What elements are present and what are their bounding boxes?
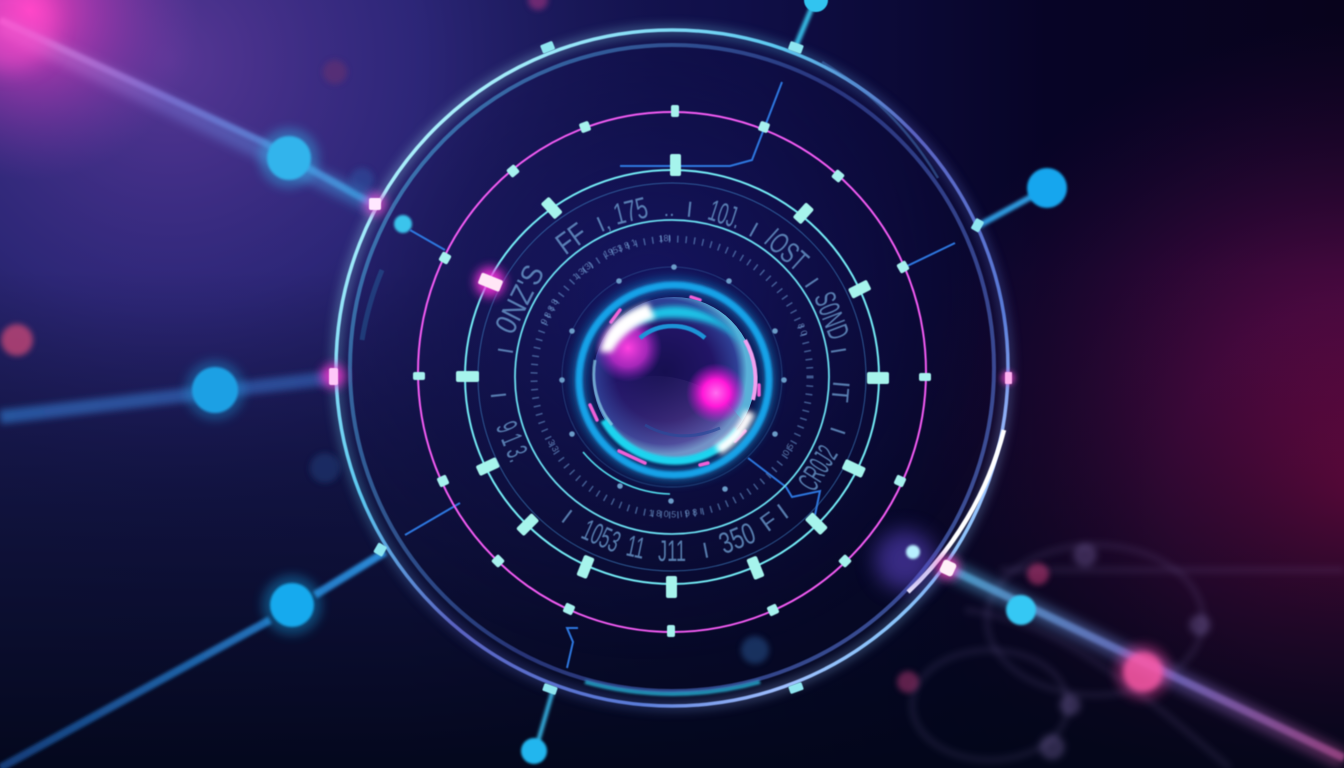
connector: bottom-left beam with node (0, 552, 385, 768)
cyan data rings (465, 170, 879, 584)
connector: bottom-right beam with nodes (897, 563, 1344, 760)
tiny scale digits: 8 0 (796, 322, 809, 337)
thin blue circuit traces (405, 82, 955, 668)
ghost circuit loops, bottom right (912, 545, 1344, 768)
tiny scale digits (538, 233, 809, 520)
data ring lettering: CR0J2 (792, 440, 844, 497)
connector: bottom node (521, 690, 553, 764)
data ring lettering: 0NZ'S (489, 260, 551, 339)
data ring lettering: I (745, 217, 762, 242)
data ring lettering: I (700, 537, 711, 563)
magenta ring (418, 112, 926, 632)
data ring lettering: 175 (610, 191, 651, 232)
data ring lettering: IOST (758, 223, 814, 278)
data ring lettering: .. (663, 199, 675, 221)
core lens ring (579, 285, 769, 475)
faint decorative orbs (310, 0, 548, 483)
data ring lettering: FF (550, 217, 594, 261)
data ring lettering: 11 (623, 530, 648, 566)
data ring lettering (486, 191, 855, 568)
lens glass interior (338, 32, 1006, 704)
tiny scale digits: 1 8 0 5 (648, 508, 677, 520)
data ring lettering: J11 (658, 535, 686, 568)
connector: top node (795, 0, 828, 48)
pink blurred node, left (1, 324, 33, 356)
data ring lettering: I (493, 346, 518, 356)
data ring lettering: I (825, 424, 851, 438)
connector: right node (978, 168, 1067, 226)
connector: left beam with node (0, 360, 330, 420)
outer glass ring (336, 30, 1008, 706)
large cyan ring markers (456, 154, 889, 598)
pink ring dashes (590, 297, 759, 465)
data ring lettering: F I (755, 499, 794, 537)
data ring lettering: I (826, 346, 851, 356)
data ring lettering: 1053 (577, 514, 625, 559)
data ring lettering: I (557, 505, 577, 528)
data ring lettering: I (685, 197, 694, 222)
data ring lettering: S0ND (807, 288, 855, 344)
glowing pink junction nodes (321, 193, 1015, 590)
small orb near lower rim (741, 636, 769, 664)
data ring lettering: 350 (714, 517, 760, 561)
radial tick scale (534, 239, 810, 515)
data ring lettering: I (800, 273, 824, 292)
tiny scale digits: 0 5 (781, 442, 796, 458)
tiny scale digits: 3 3 (546, 438, 561, 453)
inner ring dots (559, 264, 787, 504)
tiny scale digits: 18I (658, 233, 671, 244)
connector: top-left beam with node (0, 0, 375, 205)
tiny scale digits: 1 3(3) (570, 259, 595, 282)
outer ring connector tabs (373, 41, 984, 695)
magenta ring markers (413, 105, 931, 637)
data ring lettering: IT (825, 380, 854, 404)
central glass orb (593, 297, 756, 461)
tiny scale digits: 9 8 8 8 (538, 297, 560, 326)
data ring lettering: 9 1 3. (489, 417, 535, 466)
tiny scale digits: I 9 8 I (679, 506, 703, 519)
data ring lettering: 10J. (704, 194, 745, 235)
data ring lettering: I (486, 391, 511, 400)
data ring lettering: I, (593, 209, 614, 237)
pink glowing marker (475, 267, 505, 297)
tiny scale digits: 1953 8 1 (602, 237, 638, 259)
